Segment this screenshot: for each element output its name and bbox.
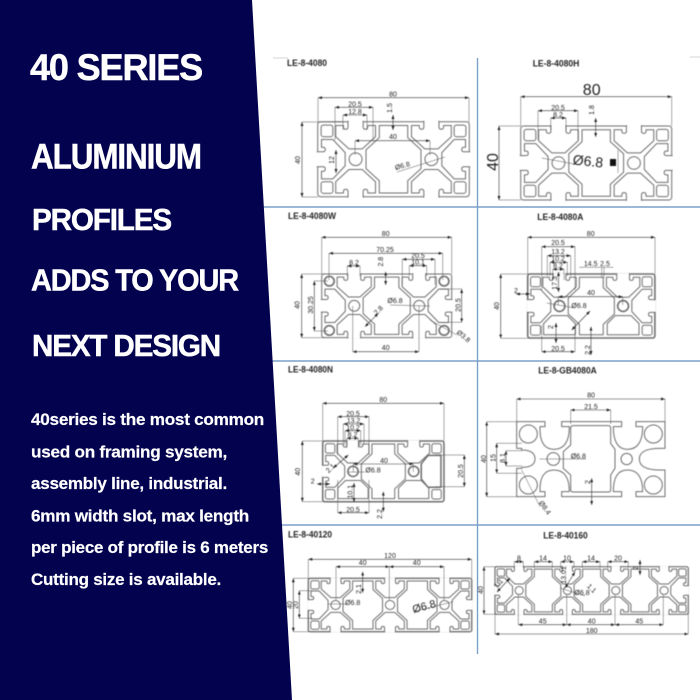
panel title: LE-8-4080A bbox=[537, 212, 584, 222]
dimensions: 14.5 bbox=[584, 261, 598, 268]
panel: LE-8-4080 bbox=[287, 58, 470, 198]
dimensions: 8.1 bbox=[500, 453, 507, 463]
dimensions: 120 bbox=[384, 553, 396, 560]
dimensions: Ø6.8 bbox=[574, 590, 590, 597]
dimensions: 2.8 bbox=[373, 305, 385, 317]
dimensions: 20 bbox=[614, 556, 622, 563]
dimensions bbox=[295, 92, 469, 197]
dimensions: 80 bbox=[379, 397, 387, 404]
dimensions: 40 bbox=[389, 134, 397, 141]
dimensions: 2 bbox=[514, 288, 518, 295]
dimensions: 80 bbox=[583, 82, 601, 99]
dimensions: 10.2 bbox=[346, 425, 360, 432]
dimensions: 40 bbox=[478, 586, 485, 594]
dimensions: 14 bbox=[539, 556, 547, 563]
dimensions: 70.25 bbox=[376, 247, 394, 254]
panel: LE-8-4080H bbox=[485, 59, 673, 201]
heading line: aluminium: ALUMINIUM bbox=[31, 138, 201, 177]
dimensions bbox=[481, 392, 665, 516]
dimensions: Ø6.8 bbox=[387, 298, 403, 305]
dimensions: 15 bbox=[490, 454, 498, 462]
dimensions: 40 bbox=[295, 156, 302, 164]
dimensions: 40 bbox=[359, 560, 367, 567]
dimensions: 40 bbox=[485, 153, 502, 171]
dimensions: 20.5 bbox=[346, 411, 360, 418]
dimensions: 2.2 bbox=[377, 509, 384, 519]
profile drawing bbox=[520, 125, 673, 201]
dimensions: 13.2 bbox=[347, 418, 360, 425]
panel: LE-8-GB4080A bbox=[481, 365, 665, 516]
profile drawing bbox=[317, 121, 470, 198]
dimensions: 8 bbox=[517, 556, 521, 563]
dimensions: 80 bbox=[382, 231, 390, 238]
dimensions: 40 bbox=[588, 618, 596, 626]
dimensions: 40 bbox=[295, 468, 302, 476]
dimensions: 10.1 bbox=[411, 260, 425, 266]
dimensions: 20.5 bbox=[348, 102, 362, 108]
panel title: LE-8-40160 bbox=[543, 530, 588, 540]
dimensions: 80 bbox=[587, 231, 595, 238]
dimensions: 45 bbox=[539, 618, 547, 626]
heading line: profiles: PROFILES bbox=[32, 202, 171, 237]
grid lines bbox=[250, 57, 700, 654]
dimensions: 2.2 bbox=[585, 345, 592, 355]
panel title: LE-8-4080W bbox=[288, 211, 336, 221]
dimensions: 13.2 bbox=[551, 249, 565, 256]
dimensions bbox=[295, 397, 465, 519]
dimensions: 20.5 bbox=[411, 253, 425, 260]
profile drawing bbox=[494, 566, 689, 615]
dimensions: 40 bbox=[382, 345, 390, 352]
dimensions: 8.2 bbox=[553, 263, 563, 270]
dimensions: 12 bbox=[329, 156, 336, 164]
dimensions: 8.2 bbox=[349, 260, 359, 267]
dimensions: 17.3 bbox=[552, 276, 559, 290]
dimensions: 45 bbox=[635, 618, 643, 626]
dimensions: 40 bbox=[380, 458, 388, 465]
dimensions: 8.2 bbox=[553, 112, 563, 119]
dimensions: 2.8 bbox=[378, 257, 385, 267]
dimensions: 20 bbox=[293, 601, 300, 609]
panel: LE-8-4080W bbox=[288, 211, 471, 352]
panel: LE-8-40160 bbox=[478, 530, 689, 635]
panel: navy text sidebar bbox=[0, 0, 292, 700]
panel title: LE-8-4080 bbox=[287, 58, 327, 68]
description text block bbox=[31, 411, 268, 589]
panel: LE-8-4080N bbox=[288, 365, 465, 519]
dimensions: Ø6.8 bbox=[571, 303, 587, 310]
dimensions: Ø6.8 bbox=[394, 161, 411, 172]
description text block: 40series is the most common bbox=[31, 411, 264, 429]
profile drawing bbox=[321, 273, 453, 338]
dimensions: 20.5 bbox=[346, 507, 360, 514]
dimensions: 40 bbox=[481, 455, 488, 463]
icon: black square marker bbox=[610, 159, 616, 166]
description text block: Cutting size is available. bbox=[31, 571, 221, 589]
dimensions: 1.5 bbox=[387, 103, 394, 113]
dimensions: 80 bbox=[389, 92, 397, 98]
profile drawing bbox=[517, 422, 665, 497]
dimensions: 40 bbox=[587, 290, 595, 297]
dimensions: 10 bbox=[563, 556, 571, 563]
dimensions bbox=[485, 82, 672, 200]
dimensions: 40 bbox=[494, 302, 501, 310]
dimensions: Ø8.4 bbox=[537, 500, 552, 516]
dimensions: 40 bbox=[294, 301, 302, 309]
panel title: LE-8-4080H bbox=[533, 59, 579, 69]
dimensions: 180 bbox=[586, 628, 598, 635]
dimensions: 10.1 bbox=[348, 485, 354, 499]
panel: LE-8-40120 bbox=[287, 530, 472, 632]
dimensions: 14 bbox=[587, 556, 595, 563]
dimensions: 40 bbox=[287, 601, 294, 609]
dimensions: 2.5 bbox=[600, 261, 610, 268]
dimensions: 1.1 bbox=[585, 583, 597, 595]
heading line: next design: NEXT DESIGN bbox=[32, 328, 220, 363]
dimensions: 13.01 bbox=[561, 566, 568, 584]
heading line: adds to your: ADDS TO YOUR bbox=[31, 263, 239, 298]
dimensions: 20.5 bbox=[456, 298, 462, 312]
profile drawing bbox=[308, 578, 472, 632]
dimensions: 10.2 bbox=[551, 256, 565, 263]
dimensions bbox=[287, 553, 472, 632]
panel title: LE-8-40120 bbox=[288, 530, 332, 540]
profile drawing bbox=[322, 440, 444, 502]
dimensions bbox=[478, 556, 688, 635]
dimensions: 2.1 bbox=[325, 463, 337, 475]
dimensions: 21.5 bbox=[584, 404, 598, 411]
dimensions: Ø3.8 bbox=[455, 329, 471, 344]
description text block: used on framing system, bbox=[31, 444, 227, 462]
dimensions: 40 bbox=[413, 560, 421, 567]
profile drawing bbox=[527, 273, 656, 338]
dimensions: 20.5 bbox=[551, 346, 565, 353]
dimensions: Ø6.8 bbox=[345, 600, 360, 607]
dimensions: 2 bbox=[548, 325, 555, 329]
dimensions: Ø6.8 bbox=[365, 468, 381, 475]
dimensions: 1.1 bbox=[493, 578, 505, 590]
dimensions: 2 bbox=[311, 478, 315, 485]
dimensions: Ø6.8 bbox=[572, 151, 604, 171]
dimensions: 80 bbox=[587, 392, 595, 399]
dimensions: 12.8 bbox=[348, 109, 362, 116]
dimensions: Ø6.8 bbox=[571, 453, 586, 460]
dimensions: 1.8 bbox=[589, 105, 596, 115]
dimensions: Ø6.8 bbox=[411, 598, 437, 616]
dimensions: 8.2 bbox=[348, 432, 357, 439]
description text block: 6mm width slot, max length bbox=[31, 507, 249, 525]
dimensions: 2.1 bbox=[356, 584, 363, 594]
dimensions: 20.5 bbox=[458, 464, 465, 478]
description text block: assembly line, industrial. bbox=[31, 475, 227, 493]
dimensions: 20.5 bbox=[551, 240, 565, 247]
dimensions: 20.5 bbox=[551, 105, 565, 112]
description text block: per piece of profile is 6 meters bbox=[31, 539, 268, 557]
dimensions bbox=[294, 231, 471, 352]
dimensions: 2 bbox=[633, 566, 640, 570]
panel title: LE-8-GB4080A bbox=[538, 365, 597, 375]
dimensions: 2 bbox=[585, 480, 592, 484]
panel title: LE-8-4080N bbox=[288, 365, 333, 375]
panel: LE-8-4080A bbox=[494, 212, 656, 355]
sidebar background bbox=[0, 0, 292, 700]
dimensions: 30.25 bbox=[308, 296, 315, 314]
title: 40 SERIES bbox=[30, 47, 202, 88]
dimensions bbox=[494, 231, 655, 355]
